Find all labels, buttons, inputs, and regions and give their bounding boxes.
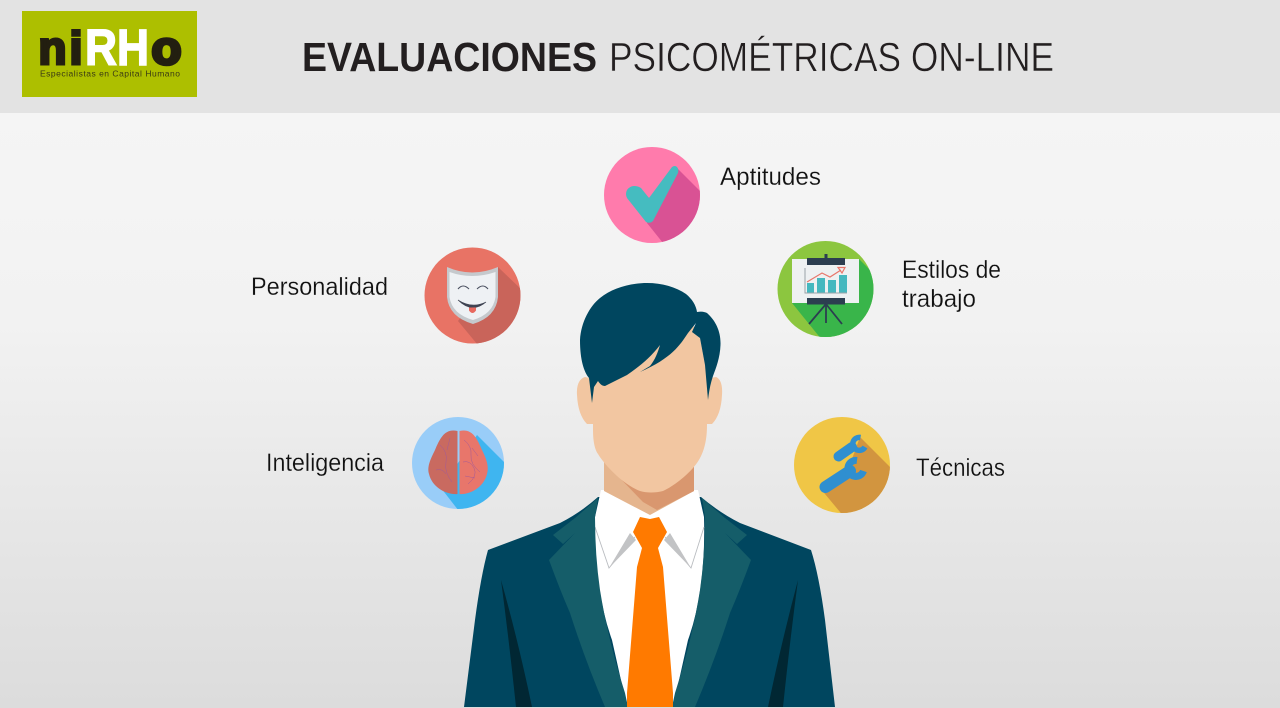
logo: nirho bbox=[22, 11, 197, 97]
label: estilos de trabajo: trabajo bbox=[902, 285, 976, 313]
person illustration bbox=[464, 283, 835, 707]
label: personalidad: Personalidad bbox=[251, 273, 388, 301]
icon: inteligencia brain bbox=[412, 417, 504, 509]
label: estilos de trabajo bbox=[902, 256, 1001, 313]
logo: nirho: o bbox=[152, 22, 182, 74]
title: PSICOMÉTRICAS ON-LINE bbox=[609, 34, 1054, 80]
label: inteligencia: Inteligencia bbox=[266, 449, 384, 477]
ears bbox=[577, 377, 722, 424]
jacket shadow folds bbox=[501, 580, 798, 707]
label: tecnicas: Técnicas bbox=[916, 454, 1005, 482]
shirt bbox=[595, 490, 704, 707]
orange tie bbox=[627, 517, 673, 707]
title bbox=[302, 34, 1054, 80]
face bbox=[593, 325, 707, 492]
header band bbox=[0, 0, 1280, 113]
title: EVALUACIONES bbox=[302, 34, 597, 80]
neck shadow bbox=[612, 460, 694, 510]
label: estilos de trabajo: Estilos de bbox=[902, 256, 1001, 284]
icon: estilos de trabajo presentation board bbox=[778, 241, 880, 340]
icon: personalidad mask bbox=[424, 248, 520, 344]
icon: aptitudes check mark bbox=[604, 147, 700, 243]
neck bbox=[604, 455, 694, 515]
shirt collar bbox=[595, 527, 704, 568]
logo: nirho: Especialistas en Capital Humano bbox=[40, 68, 180, 78]
label: aptitudes: Aptitudes bbox=[720, 163, 821, 191]
jacket lapels bbox=[549, 498, 751, 707]
icon: tecnicas wrenches bbox=[794, 417, 895, 518]
logo: nirho: RH bbox=[85, 19, 149, 76]
logo: nirho: n bbox=[38, 22, 66, 74]
suit jacket bbox=[464, 497, 835, 707]
logo: nirho: i bbox=[70, 22, 82, 74]
hair bbox=[580, 283, 721, 403]
